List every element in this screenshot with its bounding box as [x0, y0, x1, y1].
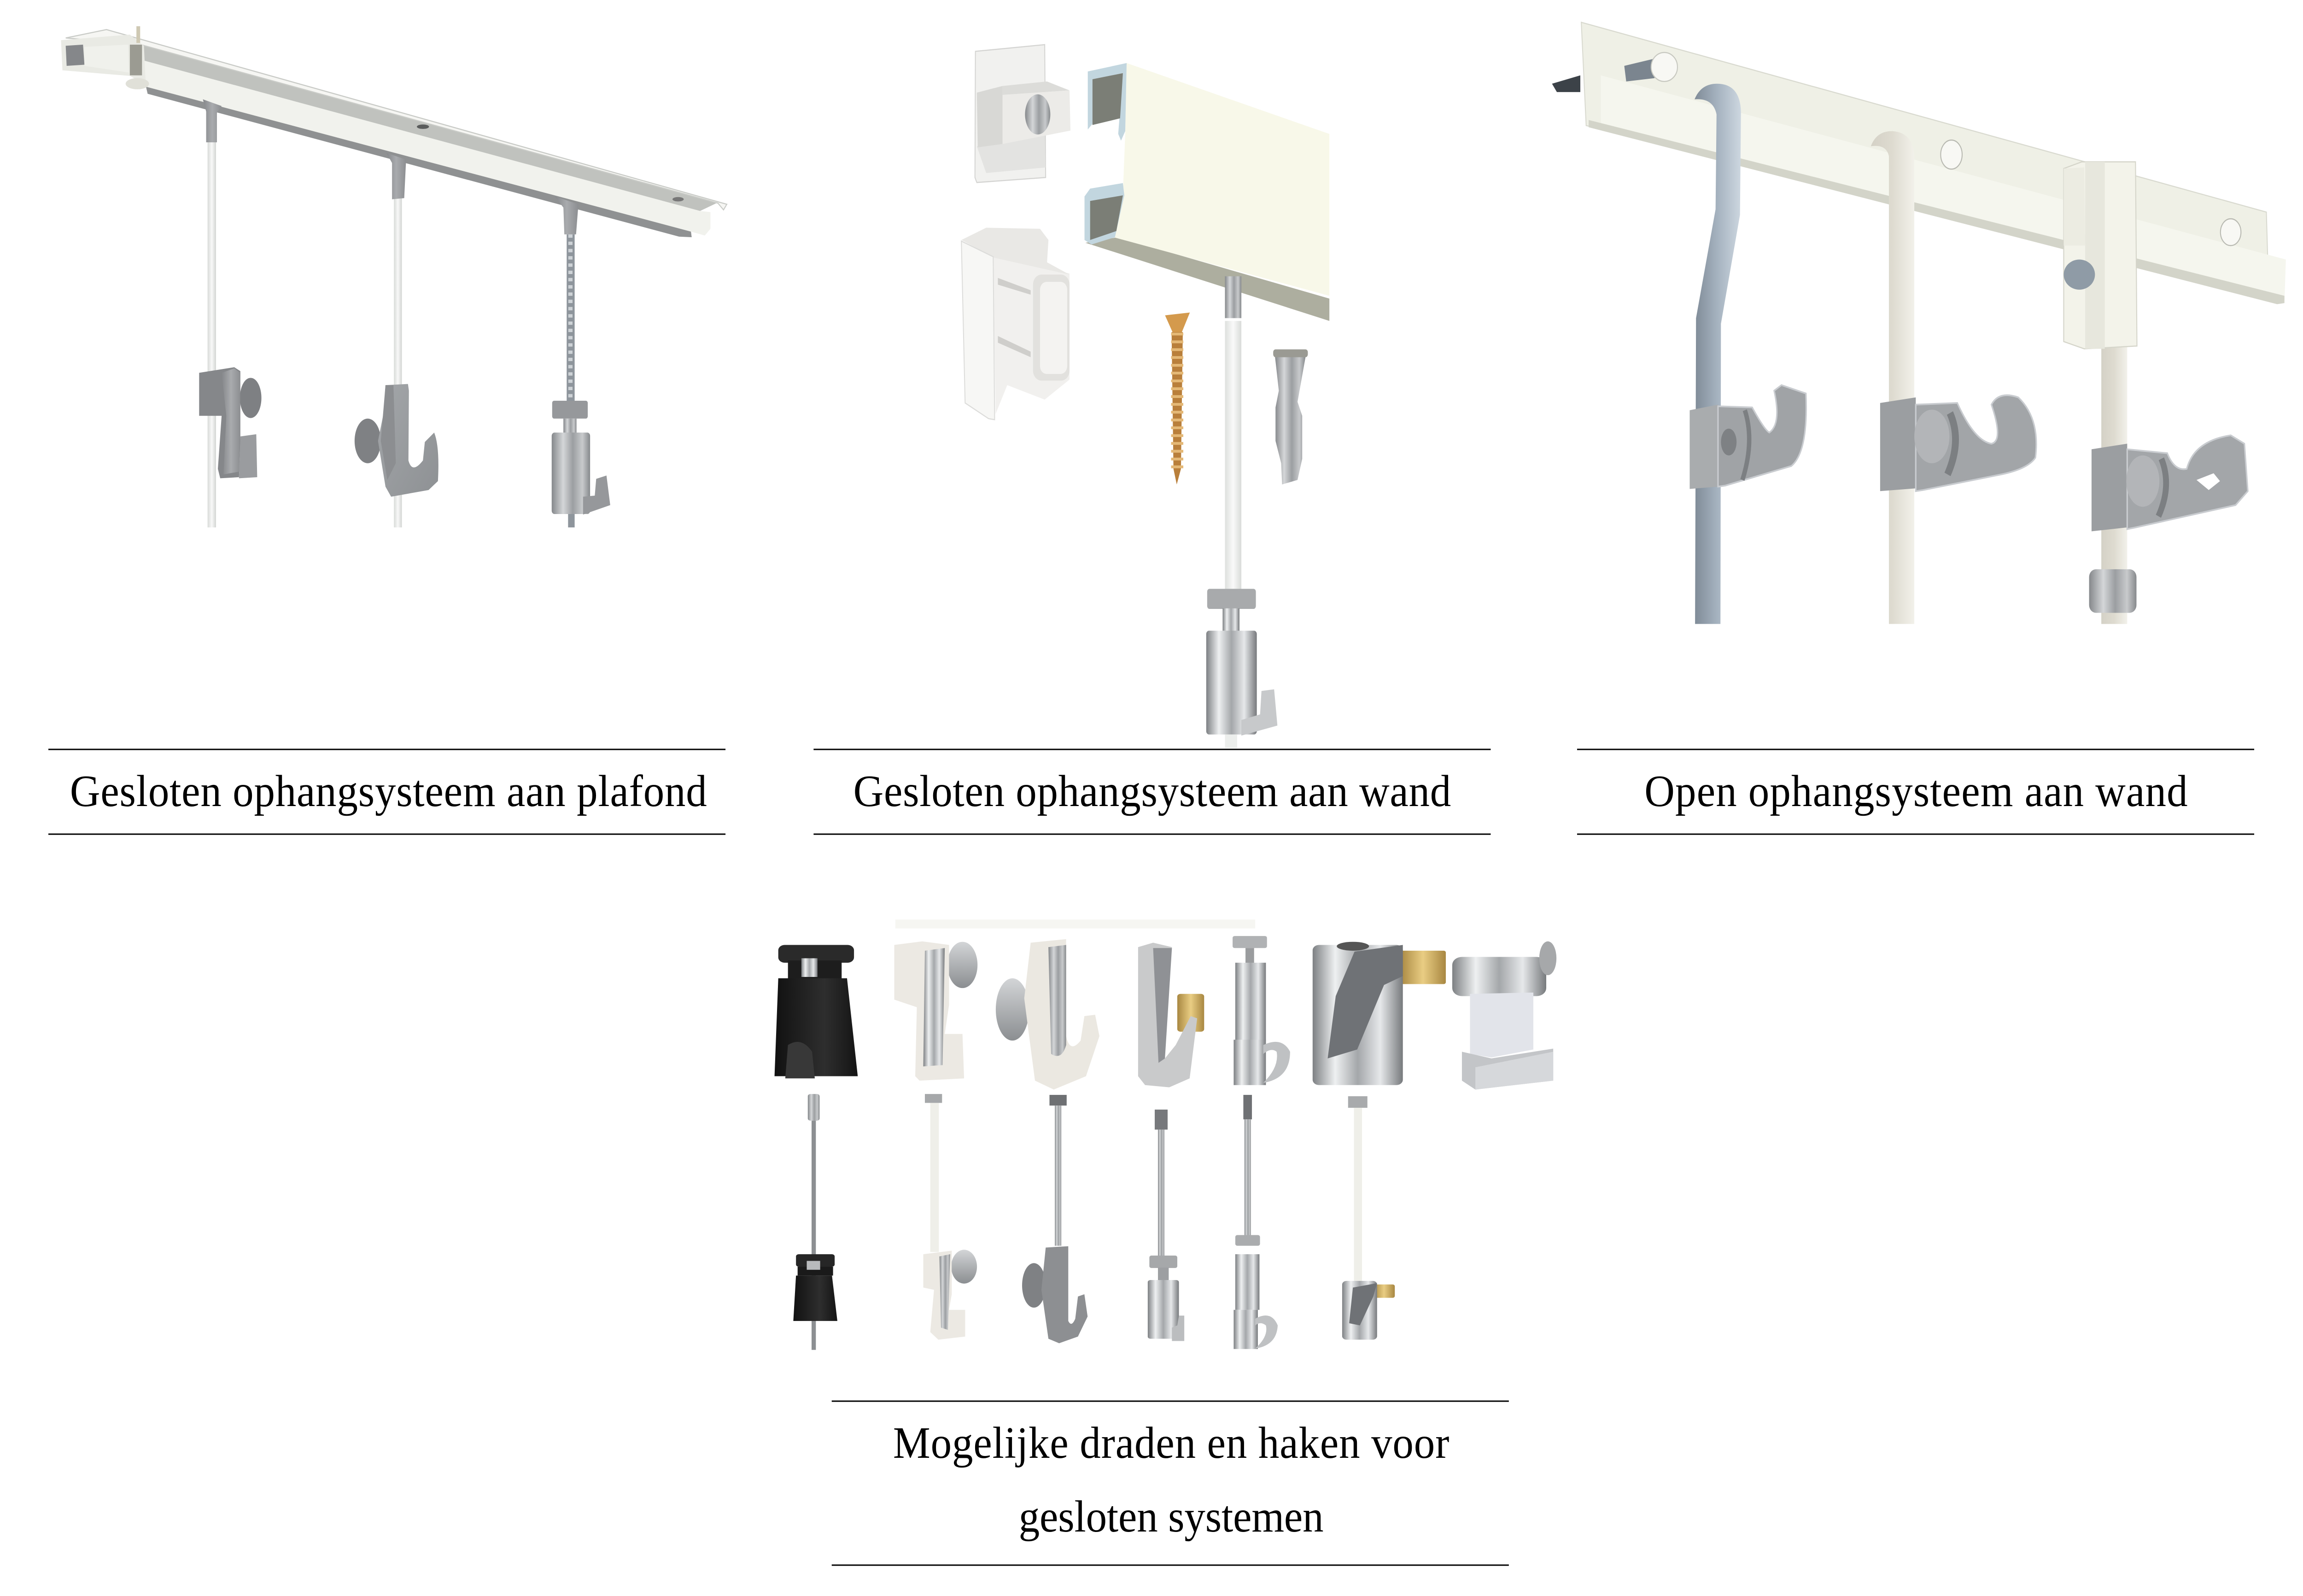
- aluminium picture rail: [1085, 63, 1329, 321]
- large hook 6: chrome block with gold pin: [1313, 942, 1446, 1085]
- wire with hook 2: [355, 153, 438, 527]
- wire with nylon hook 1: [199, 99, 262, 527]
- wall clip plate with block: [975, 45, 1070, 182]
- twisted wire with hook 3: [552, 197, 610, 527]
- ceiling screw: [126, 26, 149, 89]
- top rule: [1577, 749, 2254, 750]
- large hook 4: with gold pin: [1138, 943, 1204, 1087]
- image: wires and hooks: [775, 919, 1556, 1350]
- panel: open ophangsysteem aan wand: [1552, 22, 2286, 835]
- ceiling rail: [61, 29, 727, 237]
- large hook 5: cylinder with knob: [1233, 936, 1290, 1085]
- wire set 2: [924, 1094, 977, 1339]
- sliding rail clip with rod and hook: [2063, 162, 2248, 624]
- gold screw: [1165, 313, 1190, 485]
- bottom rule: [48, 834, 725, 835]
- bottom rule: [813, 834, 1491, 835]
- panel: gesloten ophangsysteem aan wand: [813, 45, 1491, 835]
- wire set 1: [793, 1094, 837, 1350]
- wire with hook: [1206, 276, 1277, 748]
- top rule: [813, 749, 1491, 750]
- top rule: [48, 749, 725, 750]
- wall rail: [1581, 22, 2286, 304]
- wire set 6: [1342, 1096, 1395, 1339]
- caption: Open ophangsysteem aan wand: [1644, 766, 2188, 816]
- image: wall rail exploded view: [961, 45, 1329, 748]
- panel: gesloten ophangsysteem aan plafond: [48, 26, 727, 835]
- caption: Gesloten ophangsysteem aan plafond: [70, 766, 707, 816]
- wire set 3: [1022, 1095, 1087, 1343]
- top rule: [832, 1400, 1509, 1402]
- wire set 5: [1233, 1095, 1278, 1349]
- panel: mogelijke draden en haken: [775, 919, 1556, 1566]
- caption: Gesloten ophangsysteem aan wand: [853, 766, 1451, 816]
- image: ceiling rail with three hooks: [61, 26, 727, 527]
- large hook 7: flat bracket: [1452, 941, 1556, 1089]
- wire set 4: [1148, 1110, 1184, 1341]
- white sliding clip: [961, 228, 1070, 420]
- white rod with hook: [1871, 131, 2036, 624]
- bottom rule: [832, 1564, 1509, 1566]
- large hook 1: black clip: [775, 945, 858, 1078]
- rail screws: [1552, 53, 2241, 246]
- caption: Mogelijke draden en haken voor: [893, 1418, 1449, 1468]
- large hook 2: silver: [894, 941, 977, 1081]
- caption: gesloten systemen: [1019, 1492, 1324, 1542]
- bottom rule: [1577, 834, 2254, 835]
- steel rod with hook: [1689, 84, 1806, 624]
- image: open wall rail with rods and hooks: [1552, 22, 2286, 624]
- large hook 3: silver: [996, 939, 1099, 1089]
- wall plug: [1273, 350, 1308, 485]
